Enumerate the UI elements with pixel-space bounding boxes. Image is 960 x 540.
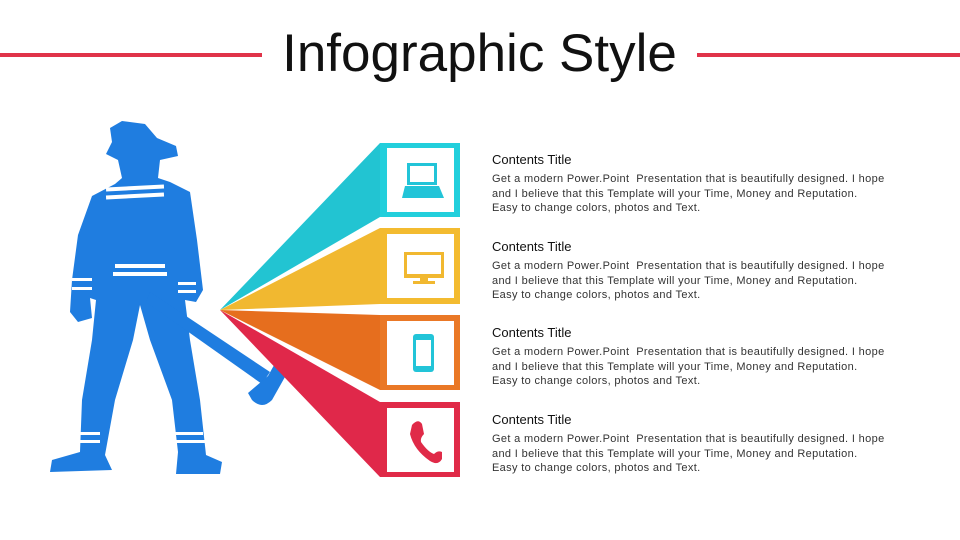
fan wedge: cyan [220,143,460,310]
text block 1 [492,152,885,214]
fan wedge: yellow [220,228,460,310]
text block 2: Get a modern Power.Point Presentation that is beautifully designed. I hope [492,260,885,272]
text block 3: Contents Title [492,325,572,340]
text block 4: and I believe that this Template will your Time, Money and Reputation. [492,448,857,460]
icon: laptop [402,163,444,198]
text block 2: Easy to change colors, photos and Text. [492,289,701,301]
text block 3: Easy to change colors, photos and Text. [492,375,701,387]
fan wedge: red [220,310,460,477]
text block 2 [492,239,885,301]
firefighter silhouette [50,121,290,474]
text block 3 [492,325,885,387]
text block 4 [492,412,885,474]
text block 3: and I believe that this Template will your Time, Money and Reputation. [492,360,857,372]
fan wedge: orange [220,310,460,390]
text block 1: Contents Title [492,152,572,167]
text block 1: Get a modern Power.Point Presentation that is beautifully designed. I hope [492,173,885,185]
text block 2: and I believe that this Template will your Time, Money and Reputation. [492,274,857,286]
text block 3: Get a modern Power.Point Presentation that is beautifully designed. I hope [492,346,885,358]
title [0,24,960,83]
icon: monitor [404,252,444,284]
title: Infographic Style [282,24,677,83]
text block 1: Easy to change colors, photos and Text. [492,202,701,214]
text block 2: Contents Title [492,239,572,254]
text block 4: Get a modern Power.Point Presentation that is beautifully designed. I hope [492,433,885,445]
icon: handset [410,421,442,463]
text block 4: Contents Title [492,412,572,427]
text block 4: Easy to change colors, photos and Text. [492,462,701,474]
icon: phone [413,334,434,372]
text block 1: and I believe that this Template will your Time, Money and Reputation. [492,188,857,200]
